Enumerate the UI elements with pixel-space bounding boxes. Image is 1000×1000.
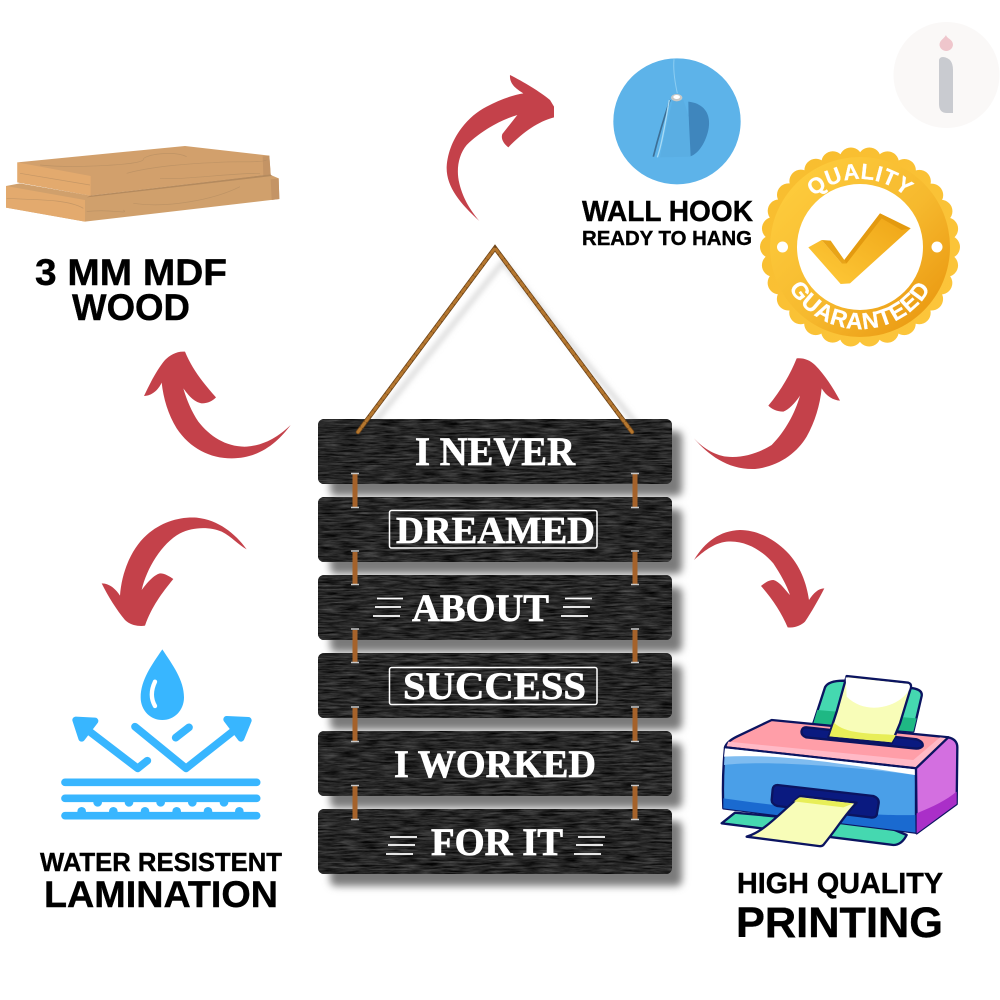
arrow: to water resistance [102,518,247,626]
badge text: quality: QUALITY [808,164,915,194]
label: high quality printing: HIGH QUALITY [737,868,943,900]
plank text: for it: FOR IT [431,821,563,864]
printer side [916,737,957,833]
label: 3 mm mdf wood [35,252,227,328]
plank text: I worked: I WORKED [394,743,596,786]
plank text: I never: I NEVER [415,429,576,474]
label: 3 mm mdf wood: WOOD [72,287,190,328]
arrow: to quality badge [694,358,840,469]
badge text: guaranteed: GUARANTEED [792,282,928,330]
hanging rope [358,248,632,432]
plank text: for it [386,821,605,864]
arrow: to printing [694,530,824,628]
label: high quality printing [736,868,943,947]
icon: check mark [808,213,911,284]
top paper slot [802,727,923,749]
bottom tray [722,813,907,845]
top paper [828,676,911,743]
connecting ropes [351,474,639,820]
label: water resistent lamination [40,847,282,915]
watermark logo [894,22,1000,128]
icon: water resistant lamination [65,649,257,816]
icon: quality guaranteed badge [760,148,960,346]
label: high quality printing: PRINTING [736,899,943,947]
hanging rope shadow [370,262,640,428]
label: water resistent lamination: LAMINATION [44,874,278,915]
plank text: about [373,587,592,630]
hanging wall sign [318,248,682,886]
sign shadows [330,431,682,886]
plank wood grain [318,419,672,874]
icon: printer [722,676,957,846]
label: water resistent lamination: WATER RESISTENT [40,847,282,877]
arrow: to wall hook [447,75,554,221]
back paper tray [813,681,922,732]
icon: wood boards [6,146,279,222]
output paper [747,796,857,846]
plank backs [318,419,672,874]
arrow: to mdf wood [144,352,291,458]
plank text: about: ABOUT [412,587,549,630]
label: wall hook ready to hang: READY TO HANG [582,227,752,250]
plank text: dreamed: DREAMED [396,510,595,552]
plank text: success: SUCCESS [403,665,586,708]
front paper slot [772,785,879,818]
printer front [723,747,916,833]
label: wall hook ready to hang [582,196,753,250]
label: wall hook ready to hang: WALL HOOK [582,196,753,228]
printer top [725,720,948,768]
label: 3 mm mdf wood: 3 MM MDF [35,252,227,293]
icon: wall hook [613,58,741,184]
